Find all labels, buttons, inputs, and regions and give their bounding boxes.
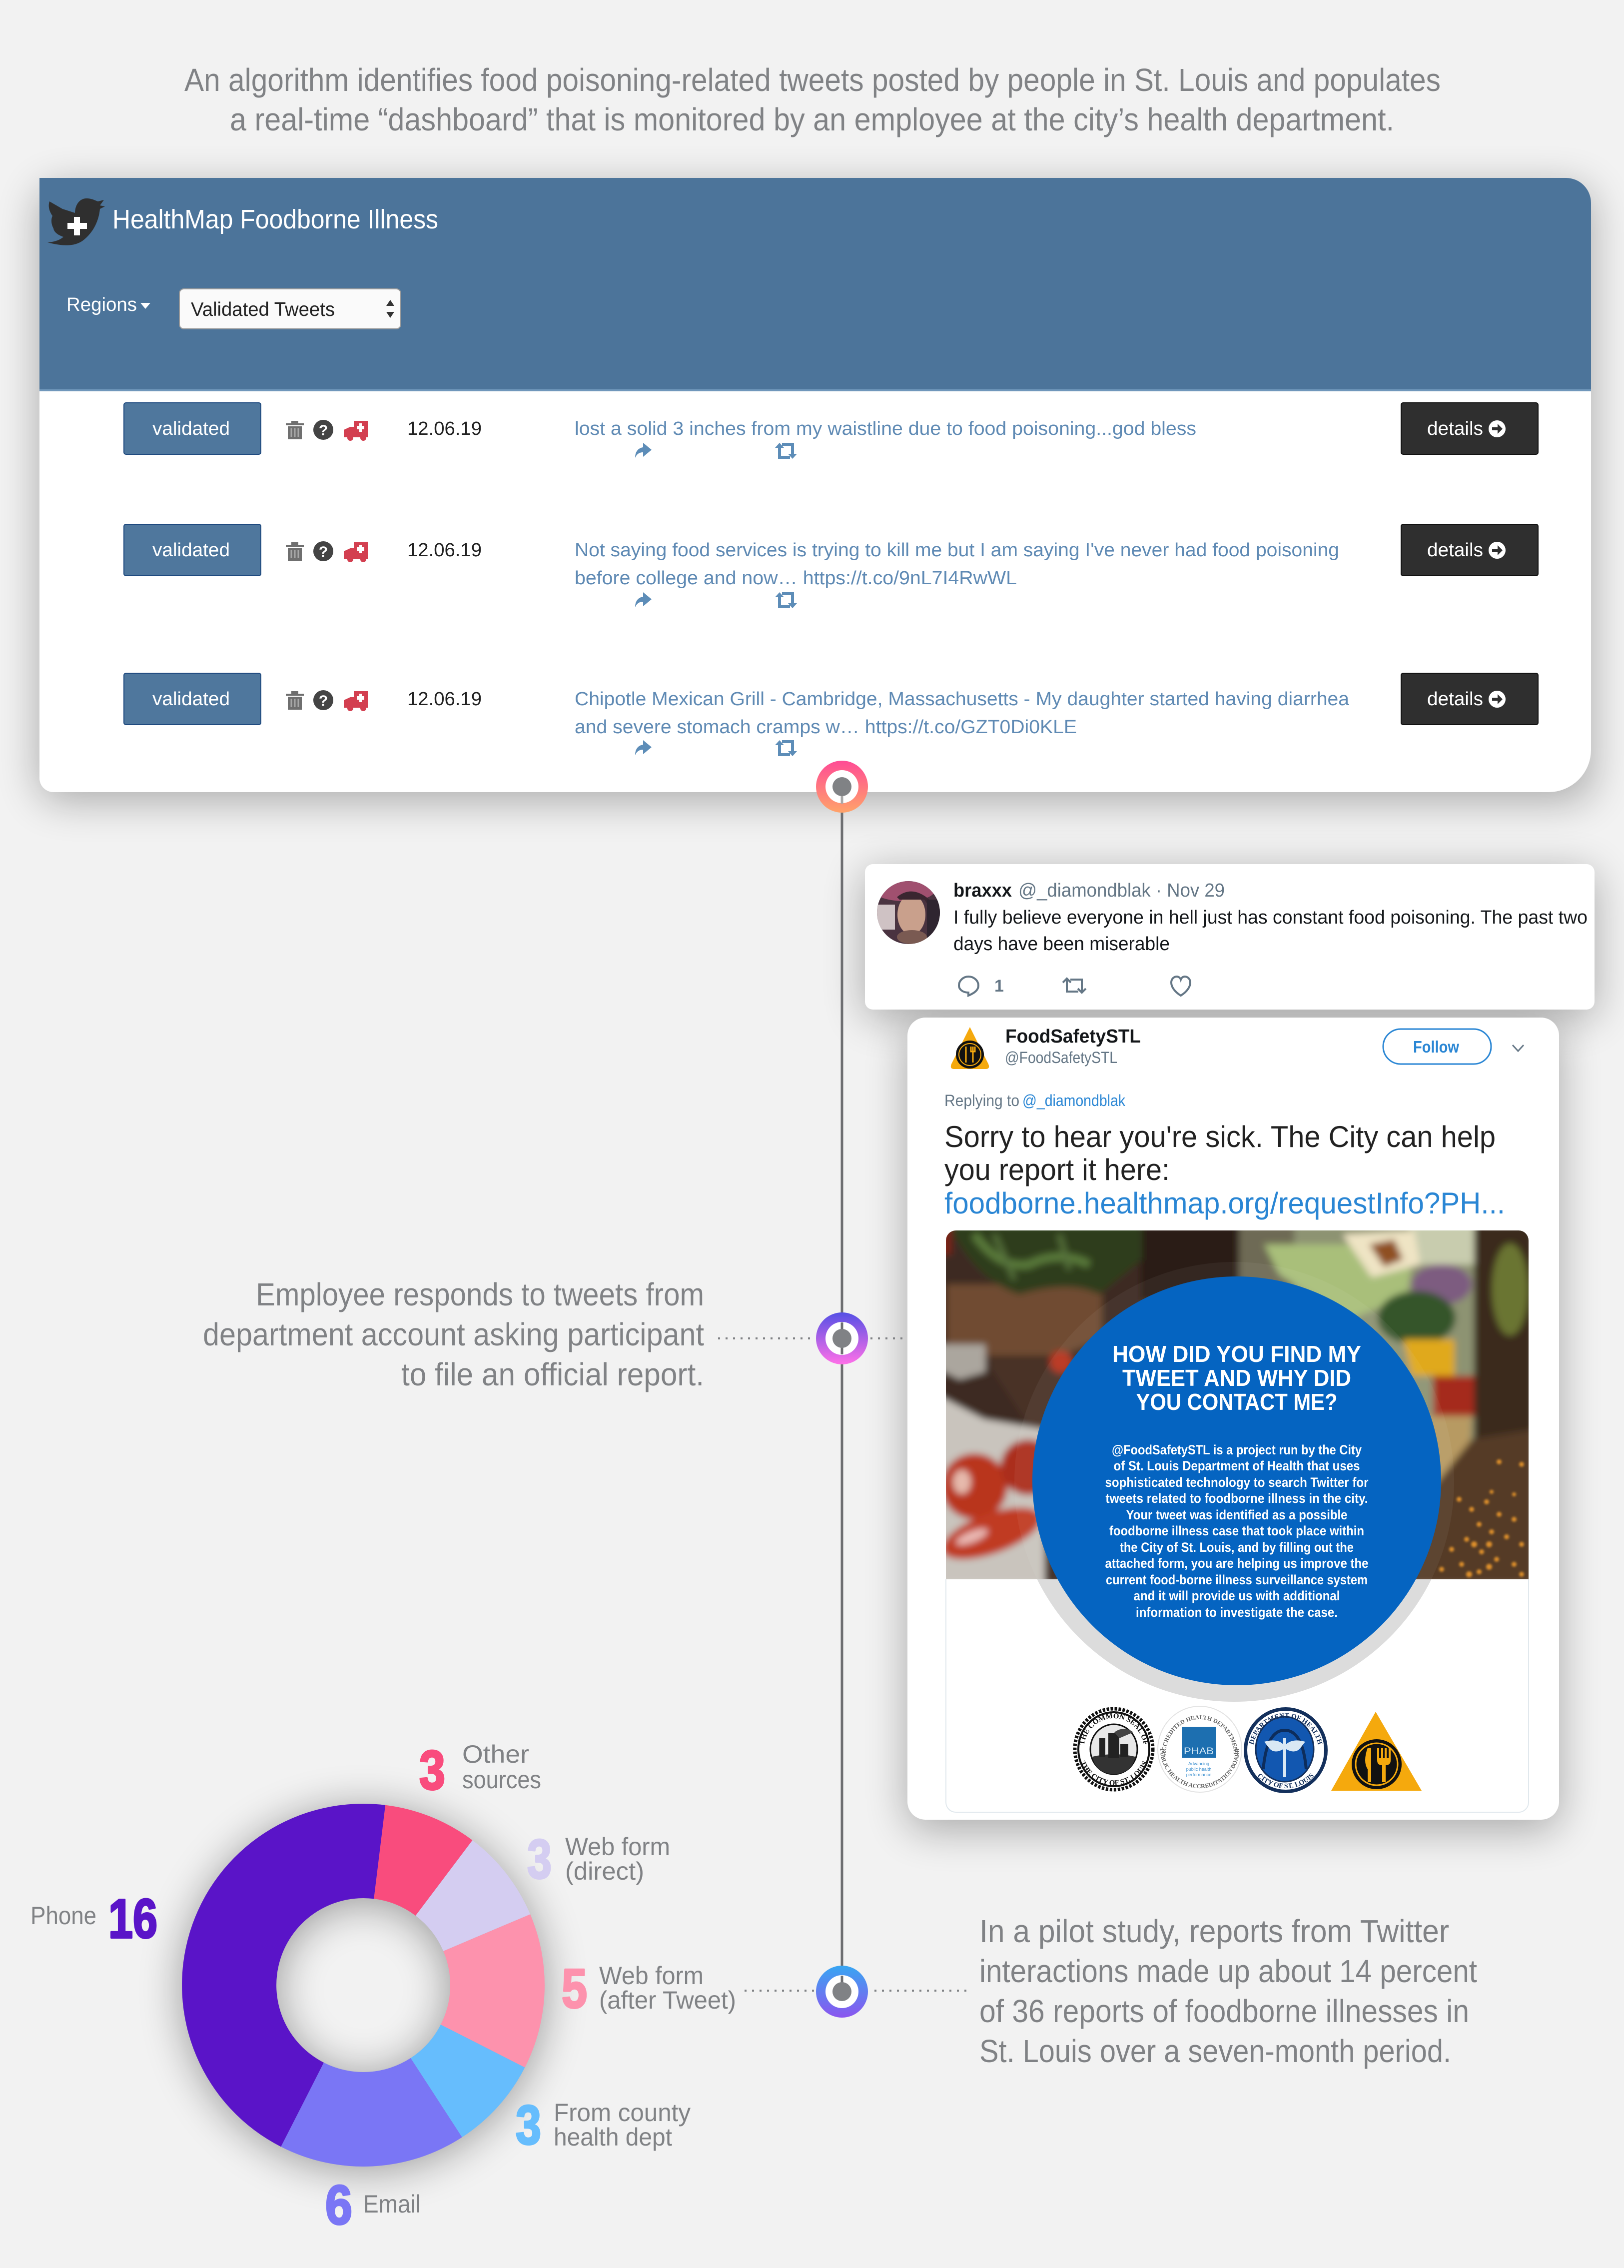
segment: web form direct	[416, 1840, 530, 1951]
callout body: the City of St. Louis, and by filling out the	[1120, 1540, 1354, 1555]
logo: city seal	[1075, 1709, 1153, 1790]
date: 12.06.19	[407, 418, 482, 439]
logo: city seal: THE CITY OF ST. LOUIS	[1082, 1760, 1146, 1785]
date: 12.06.19	[407, 689, 482, 710]
validated button	[124, 524, 261, 576]
pilot study text: In a pilot study, reports from Twitter	[979, 1913, 1449, 1949]
callout body: and it will provide us with additional	[1133, 1588, 1340, 1603]
callout heading: YOU CONTACT ME?	[1136, 1389, 1337, 1415]
label: from county health dept	[516, 2095, 691, 2156]
tweet actions: 1	[994, 977, 1004, 996]
circle shadow	[1014, 1262, 1454, 1702]
intro text: a real-time “dashboard” that is monitored by an employee at the city’s health department.	[230, 101, 1394, 137]
icon: retweet	[775, 443, 797, 459]
segment: phone	[182, 1804, 385, 2147]
callout body: tweets related to foodborne illness in the city.	[1105, 1491, 1368, 1506]
blue callout circle	[1032, 1276, 1441, 1685]
employee response text: department account asking participant	[203, 1316, 704, 1352]
label: web form after tweet: (after Tweet)	[599, 1986, 736, 2014]
label: other sources	[419, 1740, 541, 1801]
icon: share	[635, 592, 652, 607]
tweet text: Not saying food services is trying to kill me but I am saying I've never had food poisoning	[575, 540, 1339, 561]
icon: retweet	[775, 592, 797, 608]
icon: trash	[286, 542, 304, 561]
date: 12.06.19	[407, 540, 482, 561]
pilot study text	[979, 1913, 1477, 2069]
label: email: 6	[325, 2175, 352, 2236]
label: web form direct: Web form	[565, 1833, 670, 1861]
intro text	[184, 62, 1441, 137]
select box: validated tweets: Validated Tweets	[191, 299, 335, 320]
icon: trash	[286, 691, 304, 710]
replying-to line: Replying to	[944, 1092, 1019, 1110]
icon: FoodSafetySTL logo	[951, 1027, 989, 1069]
logo: PHAB: PUBLIC HEALTH ACCREDITATION BOARD	[1160, 1748, 1239, 1788]
pilot study text: St. Louis over a seven-month period.	[979, 2033, 1451, 2069]
dashboard header	[39, 178, 1591, 391]
label: phone	[30, 1888, 157, 1950]
label: phone: 16	[108, 1888, 157, 1950]
replying-to line: @_diamondblak	[1022, 1092, 1126, 1110]
label: web form direct	[527, 1829, 670, 1890]
tweet text: lost a solid 3 inches from my waistline due to food poisoning...god bless	[575, 418, 1196, 439]
icon: trash	[286, 421, 304, 439]
donut chart: report sources	[182, 1804, 545, 2167]
icon: help	[313, 690, 333, 710]
details button: details	[1427, 689, 1483, 710]
panel: HealthMap dashboard	[39, 178, 1591, 792]
callout body	[1105, 1442, 1369, 1620]
reply text: you report it here:	[944, 1153, 1170, 1186]
icon: ambulance	[344, 691, 368, 711]
icon: twitter bird with cross	[47, 198, 105, 245]
icon: ambulance	[344, 421, 368, 441]
validated button	[124, 673, 261, 725]
label: email: Email	[363, 2190, 421, 2218]
icon: help: ?	[319, 422, 328, 439]
panel: citizen tweet	[865, 864, 1595, 1010]
icon: ambulance	[344, 542, 368, 562]
icon: share	[635, 740, 652, 755]
callout heading: HOW DID YOU FIND MY	[1112, 1341, 1361, 1367]
label: other sources: 3	[419, 1740, 445, 1801]
segment: from county health dept	[411, 2025, 525, 2137]
callout body: Your tweet was identified as a possible	[1126, 1507, 1347, 1522]
reply text: Sorry to hear you're sick. The City can help	[944, 1120, 1496, 1153]
account name: @FoodSafetySTL	[1005, 1049, 1117, 1067]
logo: department of health: CITY OF ST. LOUIS	[1256, 1772, 1316, 1790]
reply text	[944, 1120, 1505, 1220]
validated button: validated	[152, 540, 230, 561]
dashboard title: HealthMap Foodborne Illness	[112, 204, 438, 234]
attached card outline	[946, 1579, 1529, 1812]
follow button	[1383, 1029, 1491, 1064]
icon: help: ?	[319, 544, 328, 560]
logo: department of health	[1244, 1707, 1328, 1793]
tweet header: braxxx	[953, 880, 1012, 901]
logo: PHAB	[1158, 1706, 1242, 1792]
pilot study text: of 36 reports of foodborne illnesses in	[979, 1993, 1469, 2029]
tweet row 1	[124, 403, 1538, 459]
details button	[1401, 673, 1538, 725]
avatar	[874, 881, 942, 944]
callout body: attached form, you are helping us improve the	[1105, 1556, 1368, 1571]
callout heading	[1112, 1341, 1361, 1415]
timeline node 2	[816, 1312, 868, 1364]
label: phone: Phone	[30, 1902, 96, 1930]
label: email	[325, 2175, 421, 2236]
label: from county health dept: health dept	[554, 2123, 672, 2151]
tweet body	[953, 907, 1588, 955]
label: web form direct: (direct)	[565, 1857, 644, 1885]
segment: web form after tweet	[441, 1914, 545, 2068]
logo: city seal: THE COMMON SEAL OF	[1079, 1713, 1148, 1744]
timeline node 1	[816, 761, 868, 813]
label: other sources: Other	[462, 1740, 529, 1768]
dotted connector: pilot study	[745, 1990, 969, 1992]
details button: details	[1427, 418, 1483, 439]
label: web form after tweet: 5	[562, 1958, 587, 2020]
pilot study text: interactions made up about 14 percent	[979, 1953, 1477, 1989]
dotted connector: employee step	[718, 1337, 905, 1339]
panel: FoodSafetySTL reply	[907, 1018, 1559, 1820]
segment: other sources	[374, 1805, 473, 1916]
label: other sources: sources	[462, 1766, 541, 1794]
tweet text	[575, 689, 1350, 738]
logo: PHAB: public health	[1186, 1767, 1211, 1772]
validated button: validated	[152, 689, 230, 710]
label: web form after tweet	[562, 1958, 736, 2020]
icon: retweet	[775, 740, 797, 756]
callout body: of St. Louis Department of Health that uses	[1113, 1458, 1360, 1473]
tweet header: @_diamondblak · Nov 29	[1018, 880, 1225, 901]
icon: share	[635, 443, 652, 458]
validated button	[124, 403, 261, 454]
icon: help	[313, 420, 333, 440]
reply text: foodborne.healthmap.org/requestInfo?PH...	[944, 1186, 1505, 1220]
logo: PHAB: performance	[1186, 1772, 1211, 1777]
timeline node 3	[816, 1966, 868, 2018]
tweet text: and severe stomach cramps w… https://t.co/GZT0Di0KLE	[575, 717, 1077, 738]
tweet row 3	[124, 673, 1538, 756]
tweet text: before college and now… https://t.co/9nL7I4RwWL	[575, 568, 1017, 589]
label: web form after tweet: Web form	[599, 1962, 704, 1990]
tweet actions	[959, 977, 1190, 996]
icon: chevron	[1513, 1045, 1524, 1051]
label: web form direct: 3	[527, 1829, 552, 1890]
segment: email	[281, 2058, 462, 2167]
employee response text	[203, 1276, 704, 1392]
intro text: An algorithm identifies food poisoning-related tweets posted by people in St. Louis and populates	[184, 62, 1441, 98]
employee response text: Employee responds to tweets from	[256, 1276, 704, 1312]
label: from county health dept: 3	[516, 2095, 541, 2156]
callout body: current food-borne illness surveillance system	[1106, 1572, 1368, 1587]
details button	[1401, 403, 1538, 454]
select box: validated tweets	[179, 289, 401, 329]
tweet row 2	[124, 524, 1538, 608]
logo: PHAB: ACCREDITED HEALTH DEPARTMENT	[1162, 1715, 1238, 1755]
callout body: @FoodSafetySTL is a project run by the City	[1112, 1442, 1362, 1457]
logo: FoodSafetySTL triangle	[1331, 1712, 1422, 1791]
icon: help	[313, 541, 333, 561]
logo: department of health: DEPARTMENT OF HEALTH	[1248, 1712, 1323, 1745]
callout body: foodborne illness case that took place within	[1109, 1523, 1364, 1538]
account name	[1005, 1026, 1141, 1067]
account name: FoodSafetySTL	[1005, 1026, 1141, 1047]
details button: details	[1427, 540, 1483, 561]
tweet body: days have been miserable	[953, 934, 1170, 955]
follow button: Follow	[1413, 1038, 1459, 1056]
replying-to line	[944, 1092, 1126, 1110]
employee response text: to file an official report.	[401, 1356, 704, 1392]
regions dropdown: Regions	[66, 294, 137, 315]
label: from county health dept: From county	[554, 2099, 691, 2127]
tweet body: I fully believe everyone in hell just has constant food poisoning. The past two	[953, 907, 1588, 928]
tweet text: Chipotle Mexican Grill - Cambridge, Massachusetts - My daughter started having diarrhea	[575, 689, 1350, 710]
logo: PHAB: PHAB	[1184, 1746, 1214, 1757]
details button	[1401, 524, 1538, 576]
food photograph	[936, 1224, 1534, 1584]
callout body: information to investigate the case.	[1136, 1605, 1338, 1620]
callout body: sophisticated technology to search Twitter for	[1105, 1475, 1369, 1490]
callout heading: TWEET AND WHY DID	[1122, 1365, 1351, 1391]
timeline line	[840, 787, 843, 1992]
icon: help: ?	[319, 693, 328, 709]
validated button: validated	[152, 418, 230, 439]
logo: PHAB: Advancing	[1188, 1761, 1209, 1766]
tweet text	[575, 540, 1339, 589]
